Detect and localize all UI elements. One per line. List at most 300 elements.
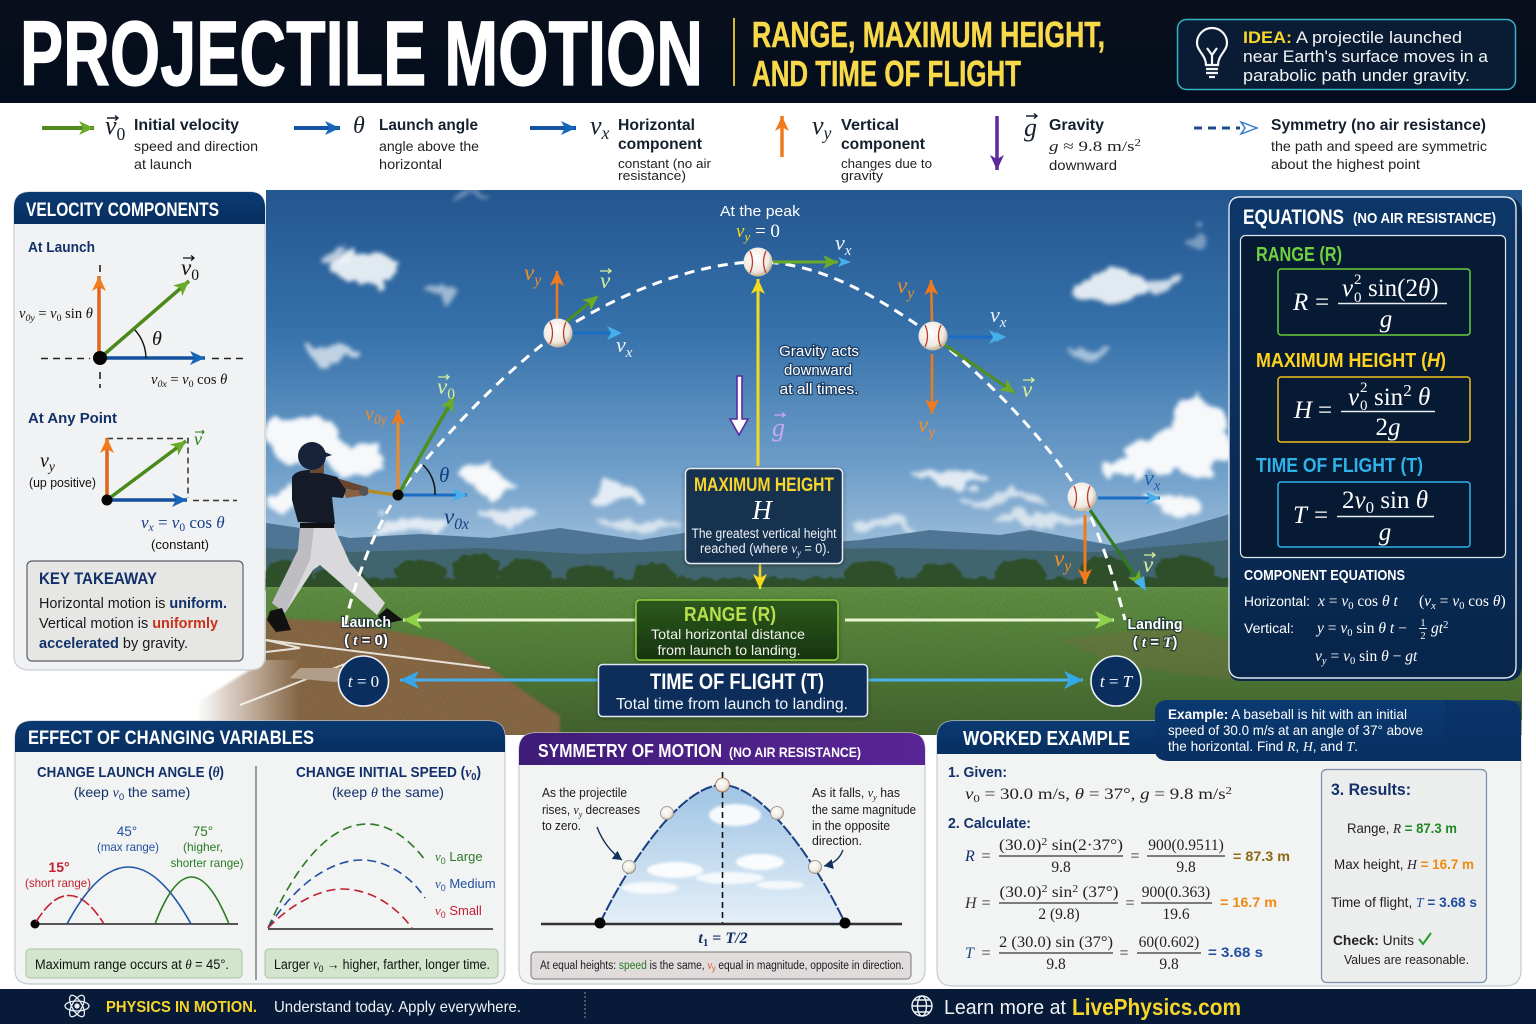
component equations: 2 xyxy=(1443,620,1448,631)
equation: range: 2 xyxy=(1354,272,1362,288)
callout: maximum height: H xyxy=(751,495,773,525)
component equations: sin xyxy=(1355,648,1381,665)
legend: vertical component: gravity xyxy=(841,169,884,183)
legend: horizontal component: component xyxy=(618,136,703,153)
equation: time of flight: g xyxy=(1379,519,1391,546)
vectors at falling point: v xyxy=(897,273,907,298)
label: landing: Landing xyxy=(1128,616,1182,633)
component equations: v xyxy=(1343,648,1350,665)
baseball: rising xyxy=(544,318,572,348)
step 1: given: 1. Given: xyxy=(948,765,1007,781)
component equations: sin xyxy=(1353,620,1378,637)
equation: maximum height: = xyxy=(1318,397,1332,424)
equation: T worked: = 3.68 s xyxy=(1208,944,1263,960)
column: change initial speed: 0 xyxy=(319,964,323,974)
vectors at rising point: v xyxy=(600,268,611,293)
callout: maximum height: reached (where v xyxy=(700,541,797,556)
column: change launch angle: (short range) xyxy=(25,876,91,890)
icon: atom xyxy=(65,993,89,1019)
equation: T worked xyxy=(965,934,1263,973)
equation: range: R xyxy=(1292,289,1308,316)
diagram: symmetric parabola: = xyxy=(708,930,725,947)
panel heading: symmetry of motion xyxy=(519,733,925,765)
column: change launch angle xyxy=(25,764,244,978)
component equations: y = v xyxy=(1317,620,1347,637)
component equations: 0 xyxy=(1459,601,1464,612)
vectors at rising point: v xyxy=(616,332,626,357)
legend: vertical component: y xyxy=(822,123,832,143)
diagram: at any point: v xyxy=(194,429,202,449)
callout: equal heights: y xyxy=(712,964,716,973)
peak labels and vector: y xyxy=(742,229,750,244)
equation: maximum height: 2 xyxy=(1360,380,1368,396)
white gutters xyxy=(505,735,519,990)
diagram: at launch: 0 xyxy=(57,313,62,324)
equation: R worked: = xyxy=(981,848,991,865)
vectors at rising point: x xyxy=(625,345,633,361)
component equations: gt xyxy=(1431,620,1443,637)
callout: idea: parabolic path under gravity. xyxy=(1243,66,1470,85)
vectors near landing: v xyxy=(1054,546,1064,571)
callout: maximum height: The greatest vertical height xyxy=(692,526,837,541)
callout: key takeaway: Vertical motion is uniformly xyxy=(39,615,219,632)
column: change initial speed: Large xyxy=(446,849,483,864)
equation: R worked: = xyxy=(1130,848,1140,865)
legend: gravity: g ≈ 9.8 m/s xyxy=(1049,139,1118,155)
column: change initial speed: v xyxy=(435,876,441,891)
equation: maximum height: sin xyxy=(1374,384,1403,411)
arrow: gravity: g xyxy=(772,413,785,442)
column: change launch angle: shorter range) xyxy=(170,856,244,870)
subheading: at any point: At Any Point xyxy=(28,410,117,427)
vectors at falling point xyxy=(897,273,1034,441)
batter figure xyxy=(267,442,403,632)
column: change initial speed: 0 xyxy=(441,883,446,893)
component equations: 0 xyxy=(1348,601,1354,612)
equation: maximum height: θ xyxy=(1412,384,1430,411)
equation: maximum height: 2 xyxy=(1403,381,1412,400)
diagram: at any point: y xyxy=(47,459,56,474)
vectors at falling point: v xyxy=(918,412,928,437)
legend: launch angle: horizontal xyxy=(379,156,442,172)
panel: equations xyxy=(1229,197,1522,681)
equation: H worked: = xyxy=(1125,895,1135,912)
component equations: cos xyxy=(1464,593,1493,610)
equation: R worked: 900(0.9511) xyxy=(1148,837,1224,854)
callout: equal heights xyxy=(531,952,911,979)
launch vectors xyxy=(365,374,469,533)
callout: idea: IDEA: A projectile launched xyxy=(1243,28,1462,47)
launch vectors: v xyxy=(365,403,374,425)
diagram: at launch: v xyxy=(151,372,157,388)
component equations: v xyxy=(1315,648,1322,665)
text: rising note: As the projectile xyxy=(542,786,627,800)
equation: H worked: 2 xyxy=(1042,884,1048,895)
column: change initial speed: Small xyxy=(446,903,482,918)
panel: symmetry of motion xyxy=(519,733,925,984)
legend: gravity xyxy=(997,113,1141,173)
text: falling note: direction. xyxy=(812,834,862,848)
legend: gravity: 2 xyxy=(1135,138,1141,149)
component equations: Vertical: xyxy=(1244,620,1294,636)
legend: initial velocity: Initial velocity xyxy=(134,117,239,134)
legend: vertical component: v xyxy=(812,111,824,140)
column: change initial speed: 0 xyxy=(471,772,477,783)
component equations: θ) xyxy=(1493,593,1506,610)
legend: horizontal component: Horizontal xyxy=(618,117,695,134)
text: falling note xyxy=(812,786,916,848)
column: change launch angle: (max range) xyxy=(97,840,159,854)
callout: equal heights: equal in magnitude, opposite in direction. xyxy=(715,960,904,972)
column: change initial speed: (keep θ the same) xyxy=(332,784,444,801)
badge: t = 0 xyxy=(338,656,388,706)
column: change launch angle: 0 xyxy=(119,792,124,803)
callout: range: Total horizontal distance xyxy=(651,626,805,642)
column: change initial speed: 0 xyxy=(441,856,446,866)
equation: R worked: = 87.3 m xyxy=(1233,848,1290,864)
example problem statement: speed of 30.0 m/s at an angle of 37° above xyxy=(1168,722,1423,738)
equation: time of flight: T xyxy=(1293,502,1309,529)
equation: T worked: 2 (30.0) sin (37°) xyxy=(999,934,1113,951)
column: change launch angle: Maximum range occurs at θ = 45°. xyxy=(35,957,229,972)
footer bar: PHYSICS IN MOTION. xyxy=(106,999,257,1016)
callout: maximum height: y xyxy=(796,548,802,558)
badge: t = T: t = T xyxy=(1100,672,1134,691)
diagram: at launch: v xyxy=(181,255,191,280)
panel heading: equations: (NO AIR RESISTANCE) xyxy=(1353,210,1496,227)
diagram: at any point xyxy=(29,429,237,552)
diagram: at any point: θ xyxy=(216,513,225,532)
panel heading: symmetry of motion: SYMMETRY OF MOTION xyxy=(538,741,722,761)
component equations: θ t − xyxy=(1378,620,1407,637)
column: change launch angle: 15° xyxy=(48,859,70,875)
equation: time of flight: = xyxy=(1314,502,1328,529)
legend: gravity: Gravity xyxy=(1049,117,1104,134)
component equations: y xyxy=(1321,656,1327,667)
callout: results: Max height, H = 16.7 m xyxy=(1334,856,1474,873)
footer bar: Understand today. Apply everywhere. xyxy=(274,999,521,1016)
legend: horizontal component: resistance) xyxy=(618,169,686,183)
component equations: 1 xyxy=(1420,618,1426,629)
step 1: given: 2 xyxy=(1226,786,1232,797)
diagram: symmetric parabola xyxy=(541,772,902,949)
step 1: given: 0 xyxy=(973,794,980,805)
equation: time of flight: TIME OF FLIGHT (T) xyxy=(1256,455,1423,477)
launch vectors: θ xyxy=(439,463,449,487)
step 1: given: = 30.0 m/s, xyxy=(980,786,1075,803)
vectors at rising point xyxy=(524,260,633,361)
vectors near landing: v xyxy=(1143,552,1154,577)
peak labels and vector: = 0 xyxy=(750,221,780,242)
panel heading: effect of changing variables: EFFECT OF CHANGING VARIABLES xyxy=(28,728,314,749)
column: change initial speed: 0 xyxy=(441,910,446,920)
equation: time of flight: θ xyxy=(1416,487,1428,514)
baseball: near landing xyxy=(1068,482,1096,512)
diagram: at any point: (up positive) xyxy=(29,476,96,490)
callout: results: Time of flight, T = 3.68 s xyxy=(1331,894,1477,911)
callout: key takeaway xyxy=(27,561,243,661)
diagram: at launch xyxy=(19,255,244,390)
peak labels and vector: x xyxy=(844,243,852,259)
callout: key takeaway: KEY TAKEAWAY xyxy=(39,569,158,588)
equation: range: v xyxy=(1342,275,1354,302)
equation: maximum height: 0 xyxy=(1360,398,1368,414)
vectors near landing: x xyxy=(1153,478,1161,494)
equation: R worked: sin(2·37°) xyxy=(1047,837,1123,854)
component equations: Horizontal: xyxy=(1244,593,1310,609)
column: change launch angle: (keep v xyxy=(74,784,119,801)
arrow: gravity xyxy=(730,376,785,442)
footer bar xyxy=(0,989,1536,1024)
component equations: θ t xyxy=(1382,593,1398,610)
text: gravity note: downward xyxy=(784,362,852,379)
column: change launch angle: 45° xyxy=(117,824,137,839)
diagram: at launch: 0y xyxy=(25,313,35,324)
equation: range: sin(2θ) xyxy=(1368,275,1439,302)
diagram: at launch: 0 xyxy=(191,267,199,284)
equation: H worked: sin xyxy=(1048,884,1072,901)
component equations: v xyxy=(1452,593,1459,610)
equation: H worked: H xyxy=(964,895,978,912)
step 1: given: θ = 37°, g = 9.8 m/s xyxy=(1075,786,1212,803)
equation: T worked: = xyxy=(981,945,991,962)
legend: vertical component: component xyxy=(841,136,926,153)
launch vectors: 0y xyxy=(374,412,388,427)
column: change initial speed: Larger v xyxy=(274,957,319,972)
footer bar: Learn more at xyxy=(944,997,1066,1019)
panel heading: symmetry of motion: (NO AIR RESISTANCE) xyxy=(729,744,861,760)
legend: launch angle: θ xyxy=(353,113,365,139)
callout: time of flight: Total time from launch to landing. xyxy=(616,696,848,713)
column: change launch angle: (higher, xyxy=(183,840,223,854)
column: change launch angle: the same) xyxy=(124,784,190,800)
diagram: at any point: v xyxy=(141,513,149,532)
text: falling note: y xyxy=(872,792,877,802)
equation: H worked: 2 (9.8) xyxy=(1038,906,1080,923)
diagram: at launch: 0x xyxy=(157,379,167,390)
component equations: = xyxy=(1327,648,1343,665)
badge: t = 0: t = 0 xyxy=(348,672,379,691)
diagram: at launch: = xyxy=(167,372,182,388)
icon: check mark xyxy=(1419,933,1431,944)
subtitle xyxy=(733,14,1105,94)
equation: H worked xyxy=(964,884,1277,923)
vectors at falling point: x xyxy=(999,315,1007,331)
callout: time of flight: TIME OF FLIGHT (T) xyxy=(650,669,824,694)
equation: range: RANGE (R) xyxy=(1256,244,1342,266)
equation: R worked: 9.8 xyxy=(1051,859,1071,876)
equation: H worked: 900(0.363) xyxy=(1142,884,1210,901)
callout: range: RANGE (R) xyxy=(684,604,776,626)
callout: results: Check: Units xyxy=(1333,932,1414,948)
diagram: at launch: θ xyxy=(152,328,162,350)
column: change initial speed: CHANGE INITIAL SPEED (v xyxy=(296,764,482,781)
panel: effect of changing variables xyxy=(15,721,505,984)
legend: initial velocity: at launch xyxy=(134,156,192,172)
column: change initial speed xyxy=(265,764,498,978)
component equations: 0 xyxy=(1347,628,1353,639)
equation: time of flight: 2v xyxy=(1342,487,1366,514)
equation: time of flight xyxy=(1256,455,1470,547)
legend: horizontal component: constant (no air xyxy=(618,157,711,171)
panel heading: worked example: WORKED EXAMPLE xyxy=(963,728,1130,750)
equation: time of flight: sin xyxy=(1374,487,1416,514)
column: change initial speed: → higher, farther, longer time. xyxy=(323,957,490,972)
example problem statement: Example: A baseball is hit with an initial xyxy=(1168,706,1407,722)
icon: globe xyxy=(912,996,932,1016)
trajectory dashed path xyxy=(345,262,1125,625)
legend: horizontal component: x xyxy=(601,123,610,143)
equation: R worked: (30.0) xyxy=(999,837,1036,854)
scene: baseball field background xyxy=(140,190,1522,740)
text: falling note: As it falls, v xyxy=(812,786,873,800)
legend: symmetry: the path and speed are symmetric xyxy=(1271,138,1487,154)
diagram: at launch: v xyxy=(50,306,57,322)
equation: T worked: = xyxy=(1119,945,1129,962)
title: PROJECTILE MOTION xyxy=(20,3,703,105)
panel: velocity components xyxy=(14,192,265,670)
baseball: peak xyxy=(744,248,772,276)
legend: horizontal component: v xyxy=(590,111,602,140)
text: falling note: the same magnitude xyxy=(812,803,916,817)
baseball: falling xyxy=(918,322,948,350)
column: change initial speed: Medium xyxy=(446,876,496,891)
peak labels and vector xyxy=(720,203,852,267)
text: rising note: y xyxy=(578,809,582,819)
equation: T worked: 9.8 xyxy=(1159,956,1179,973)
label: launch: Launch xyxy=(341,614,391,631)
column: change launch angle: 75° xyxy=(193,824,213,839)
diagram: symmetric parabola: 1 xyxy=(703,937,708,949)
component equations: x = v xyxy=(1318,593,1348,610)
diagram: at launch: θ xyxy=(86,306,93,322)
panel heading: effect of changing variables xyxy=(15,721,505,752)
legend: symmetry: about the highest point xyxy=(1271,156,1420,172)
panel heading: worked example xyxy=(937,721,1160,754)
legend: initial velocity: speed and direction xyxy=(134,138,258,154)
callout: key takeaway: Horizontal motion is uniform. xyxy=(39,595,227,612)
panel: worked example xyxy=(937,700,1521,986)
equation: R worked: 9.8 xyxy=(1176,859,1196,876)
panel heading: velocity components xyxy=(14,192,265,224)
example problem statement: the horizontal. Find R, H, and T. xyxy=(1168,738,1358,755)
equation: maximum height xyxy=(1256,350,1470,442)
text: gravity note: Gravity acts xyxy=(779,343,859,360)
diagram: at launch: v xyxy=(182,372,189,388)
legend: launch angle: angle above the xyxy=(379,138,479,154)
legend: initial velocity xyxy=(42,111,258,172)
callout: idea: near Earth's surface moves in a xyxy=(1243,47,1489,66)
equation: H worked: (30.0) xyxy=(1000,884,1037,901)
equation: range: 0 xyxy=(1354,290,1362,306)
vectors at falling point: y xyxy=(905,285,914,302)
equation: R worked: R xyxy=(964,848,975,865)
subtitle: RANGE, MAXIMUM HEIGHT, xyxy=(752,14,1105,55)
text: rising note xyxy=(542,786,640,833)
step 2: calculate: 2. Calculate: xyxy=(948,816,1031,832)
equation: H worked: 2 xyxy=(1072,884,1078,895)
label: launch xyxy=(341,614,391,649)
equation: range xyxy=(1256,244,1470,335)
diagram: at any point: v xyxy=(40,450,49,472)
component equations: 2 xyxy=(1420,631,1426,642)
subtitle: AND TIME OF FLIGHT xyxy=(752,53,1021,94)
callout: maximum height xyxy=(686,468,842,564)
component equations: COMPONENT EQUATIONS xyxy=(1244,567,1405,584)
legend: vertical component: Vertical xyxy=(841,117,899,134)
diagram: at any point: = xyxy=(154,513,172,532)
launch vectors: v xyxy=(437,374,447,399)
vectors at rising point: y xyxy=(532,272,541,289)
arrows: range xyxy=(403,618,1114,622)
icon: light bulb xyxy=(1197,28,1227,77)
equation: R worked xyxy=(964,837,1290,876)
arrow: falling note xyxy=(824,850,843,866)
diagram: at launch: = xyxy=(35,306,50,322)
text: rising note: decreases xyxy=(582,803,640,817)
vectors at falling point: y xyxy=(926,424,935,441)
equation: T worked: 9.8 xyxy=(1046,956,1066,973)
legend: initial velocity: 0 xyxy=(117,124,126,144)
text: rising note: rises, v xyxy=(542,803,579,817)
legend: gravity: g xyxy=(1024,113,1037,142)
equation: H worked: = 16.7 m xyxy=(1220,894,1277,910)
legend: gravity: downward xyxy=(1049,157,1117,173)
equation: range: = xyxy=(1315,289,1329,316)
text: falling note: has xyxy=(877,786,900,800)
label: launch: ( t = 0) xyxy=(344,632,388,649)
arrow: rising note xyxy=(597,827,622,860)
arrow: maximum height xyxy=(758,279,760,589)
panel heading: velocity components: VELOCITY COMPONENTS xyxy=(26,200,219,221)
diagram: at launch: cos xyxy=(194,372,220,388)
callout: maximum height: = 0). xyxy=(801,541,830,556)
example problem statement xyxy=(1155,700,1521,761)
component equations: (v xyxy=(1419,593,1431,610)
diagram: symmetric parabola: t xyxy=(698,930,703,947)
equation: maximum height: MAXIMUM HEIGHT (H) xyxy=(1256,350,1446,372)
legend: launch angle xyxy=(294,113,479,172)
column: change initial speed: ) xyxy=(476,764,481,781)
badge: t = T xyxy=(1091,656,1141,706)
text: rising note: to zero. xyxy=(542,819,581,833)
diagram: at launch: 0 xyxy=(189,379,194,390)
launch vectors: v xyxy=(444,504,454,529)
diagram: at launch: θ xyxy=(220,372,227,388)
peak labels and vector: At the peak xyxy=(720,203,801,220)
callout: range xyxy=(636,600,838,660)
panel heading: equations xyxy=(1243,206,1496,229)
equation: H worked: = xyxy=(981,895,991,912)
text: gravity note: at all times. xyxy=(780,381,858,398)
legend: symmetry: Symmetry (no air resistance) xyxy=(1271,117,1486,134)
equation: maximum height: H xyxy=(1293,397,1314,424)
equation: H worked: (37°) xyxy=(1078,884,1118,901)
callout: results: Values are reasonable. xyxy=(1344,952,1469,967)
text: gravity note xyxy=(779,343,859,398)
diagram: at any point: x xyxy=(148,521,155,534)
legend: initial velocity: v xyxy=(105,111,117,140)
diagram: symmetric parabola: T/2 xyxy=(725,930,748,947)
equation: time of flight: 0 xyxy=(1366,498,1374,517)
vectors at rising point: v xyxy=(524,260,534,285)
callout: range: from launch to landing. xyxy=(658,642,800,658)
step 1: given: v xyxy=(965,786,974,803)
label: landing xyxy=(1128,616,1182,651)
equation: T worked: T xyxy=(965,945,975,962)
equation: range: g xyxy=(1380,306,1392,333)
vectors near landing: v xyxy=(1144,465,1154,490)
